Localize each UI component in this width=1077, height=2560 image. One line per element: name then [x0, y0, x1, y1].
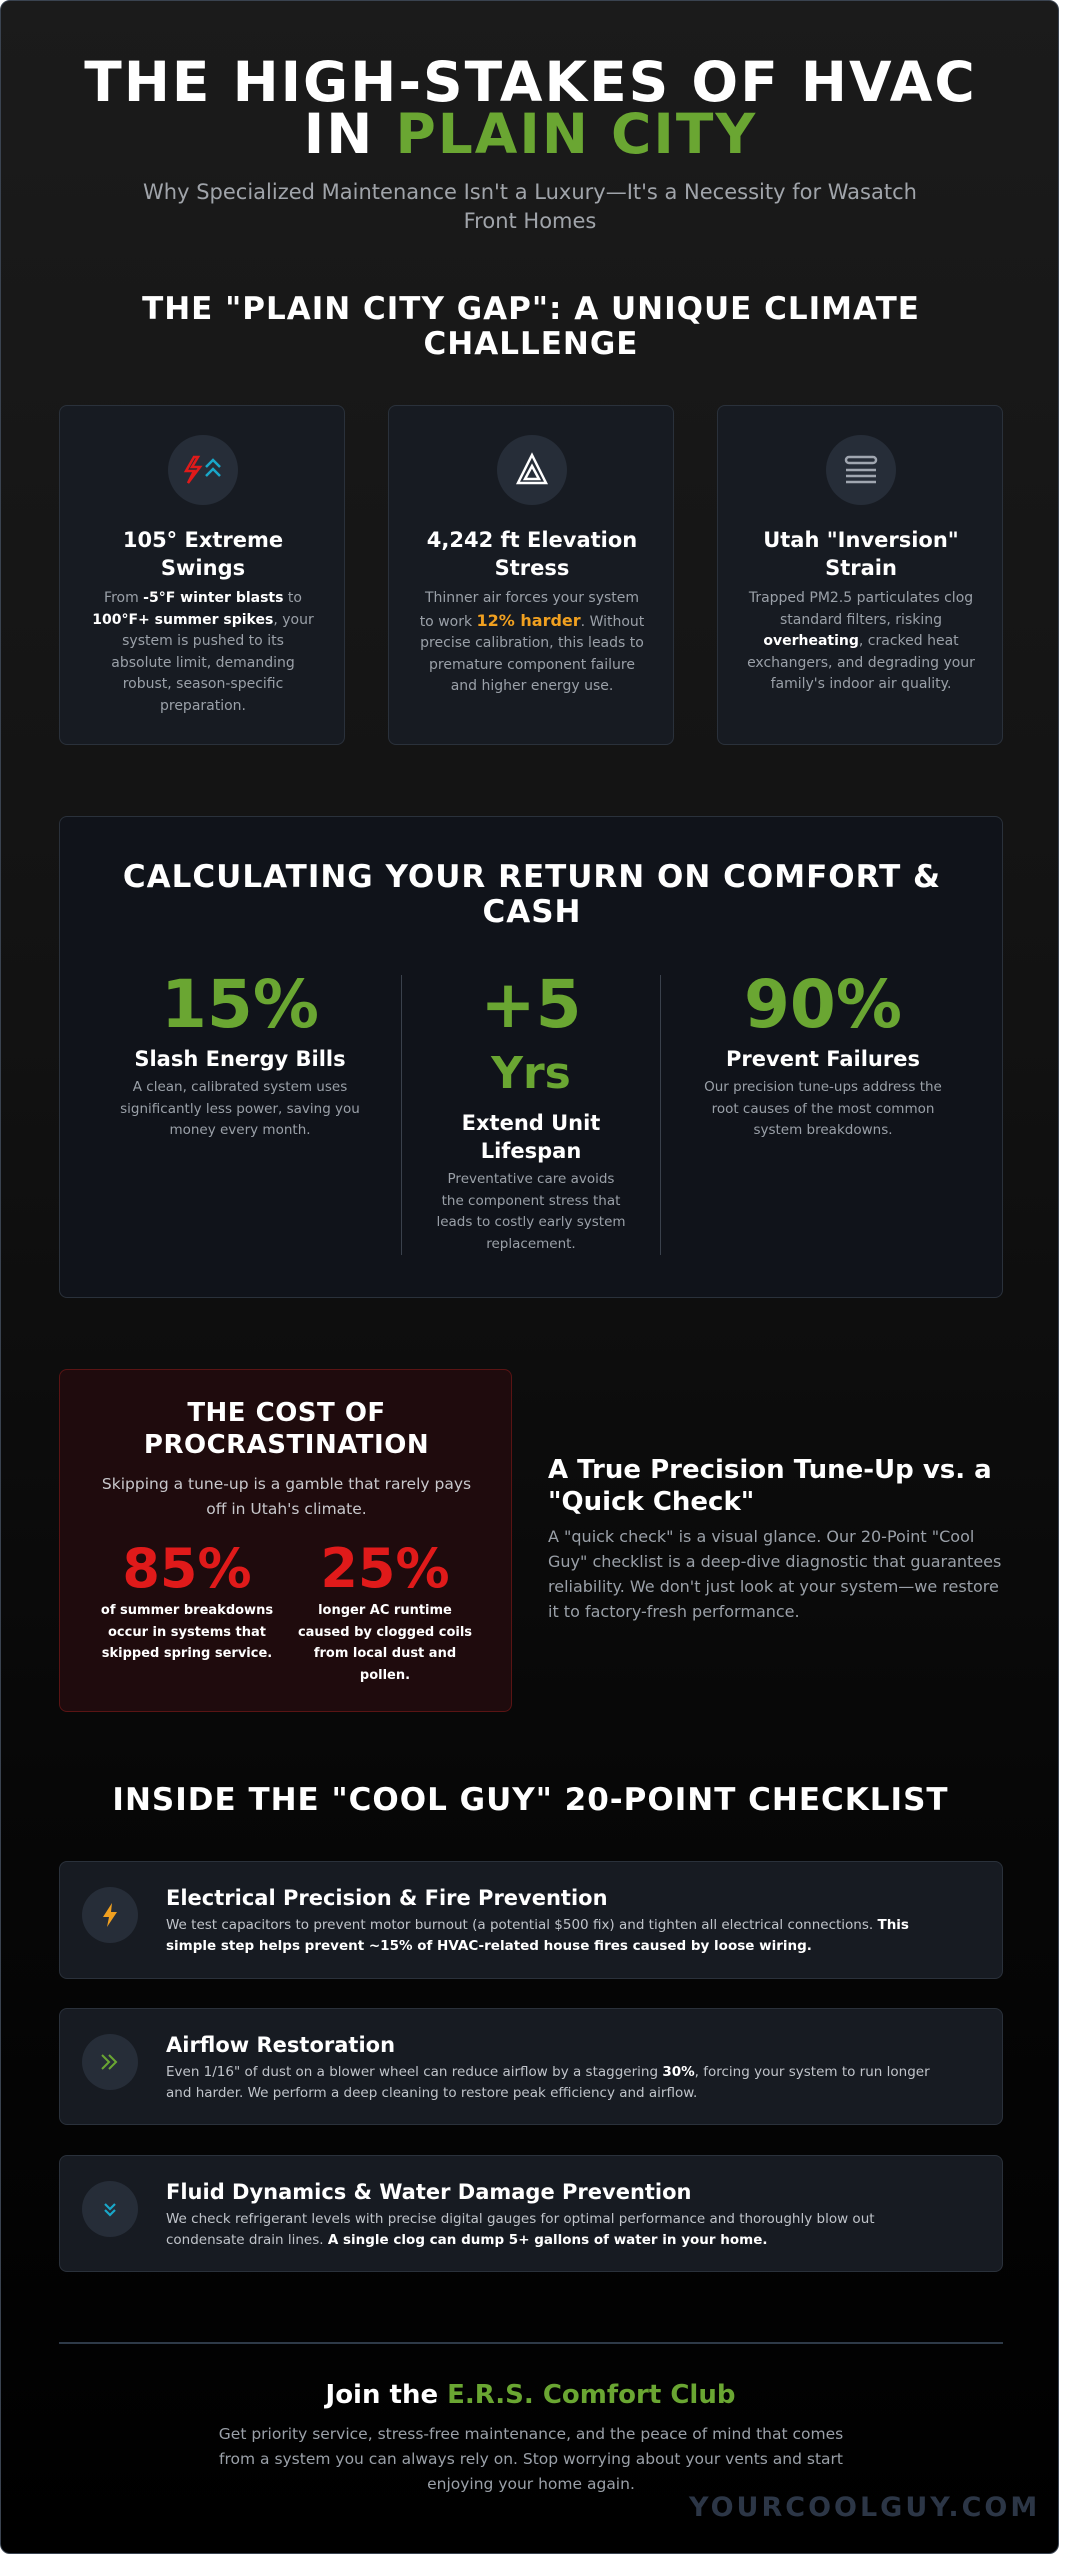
title: Fluid Dynamics & Water Damage Prevention — [166, 2180, 692, 2204]
stat: 15%: A clean, calibrated system uses significantly less power, saving you money every month. — [120, 1079, 360, 1138]
stat: 90%: Prevent Failures — [726, 1047, 920, 1071]
heading: PROCRASTINATION — [144, 1430, 429, 1460]
title: THE HIGH-STAKES OF HVAC — [84, 50, 977, 114]
card title: 105° Extreme — [123, 528, 283, 552]
stat: 85% — [101, 1537, 273, 1661]
card title — [427, 528, 637, 580]
card title: Swings — [161, 556, 245, 580]
title — [84, 50, 977, 166]
text block: precision tune-up: A True Precision Tune-Up vs. a "Quick Check" — [548, 1455, 992, 1517]
card title: Strain — [825, 556, 897, 580]
card title: Utah "Inversion" — [763, 528, 959, 552]
stat: 85%: of summer breakdowns occur in systems that skipped spring service. — [101, 1603, 273, 1661]
icon: mountain — [497, 435, 567, 505]
stat: +5 yrs — [436, 966, 626, 1252]
stat: 90% — [704, 966, 942, 1138]
card text: From -5°F winter blasts to 100°F+ summer spikes, your system is pushed to its absolute limit, demanding robust, season-specific preparation. — [92, 590, 314, 714]
footer text: Get priority service, stress-free maintenance, and the peace of mind that comes from a system you can always rely on. Stop worrying about your vents and start enjoying your home again. — [219, 2425, 843, 2493]
text: Even 1/16" of dust on a blower wheel can reduce airflow by a staggering 30%, forcing your system to run longer and harder. We perform a deep cleaning to restore peak efficiency and airflow. — [166, 2064, 930, 2101]
title: Electrical Precision & Fire Prevention — [166, 1886, 608, 1910]
panel: cost of procrastination — [59, 1369, 512, 1712]
card title: Stress — [495, 556, 569, 580]
heading: checklist: INSIDE THE "COOL GUY" 20-POINT CHECKLIST — [112, 1782, 949, 1818]
stat: 15% — [120, 966, 360, 1138]
panel: ROI — [59, 816, 1003, 1298]
icon: chevrons — [82, 2034, 138, 2090]
icon: bolt — [82, 1887, 138, 1943]
card text: Thinner air forces your system to work 12% harder. Without precise calibration, this leads to premature component failure and higher energy use. — [420, 590, 644, 694]
stat: 85%: 85% — [122, 1537, 252, 1600]
icon: lightning and arrows — [168, 435, 238, 505]
icon: filter lines — [826, 435, 896, 505]
panel: extreme swings — [59, 405, 345, 745]
card title — [123, 528, 283, 580]
heading: plain city gap: THE "PLAIN CITY GAP": A UNIQUE CLIMATE CHALLENGE — [142, 291, 920, 362]
card title — [763, 528, 959, 580]
icon: down chevrons — [82, 2181, 138, 2237]
brand watermark: YOURCOOLGUY.COM — [689, 2492, 1040, 2523]
text block: precision tune-up: A "quick check" is a visual glance. Our 20-Point "Cool Guy" checklist is a deep-dive diagnostic that guarantees reliability. We don't just look at your system—we restore it to factory-fresh performance. — [548, 1527, 1001, 1621]
stat: +5 yrs: Preventative care avoids the component stress that leads to costly early system replacement. — [436, 1171, 626, 1252]
stat: 15%: Slash Energy Bills — [134, 1047, 346, 1071]
subtitle: Why Specialized Maintenance Isn't a Luxury—It's a Necessity for Wasatch Front Homes — [143, 180, 917, 233]
stat: 90%: 90% — [744, 966, 902, 1043]
stat: 25% — [298, 1537, 472, 1682]
title: IN PLAIN CITY — [304, 102, 757, 166]
footer heading: Join the E.R.S. Comfort Club — [326, 2380, 735, 2410]
stat: +5 yrs: +5 — [480, 966, 582, 1043]
stat: 90%: Our precision tune-ups address the root causes of the most common system breakdowns. — [704, 1079, 942, 1138]
stat: 25%: longer AC runtime caused by clogged coils from local dust and pollen. — [298, 1603, 472, 1682]
heading: THE COST OF — [187, 1398, 386, 1428]
title: Airflow Restoration — [166, 2033, 395, 2057]
text: We test capacitors to prevent motor burnout (a potential $500 fix) and tighten all electrical connections. This simple step helps prevent ~15% of HVAC-related house fires caused by loose wiring. — [166, 1917, 909, 1954]
text block: precision tune-up — [548, 1455, 1001, 1621]
stat: +5 yrs: Lifespan — [481, 1139, 581, 1163]
checklist item: electrical — [59, 1861, 1003, 1979]
stat: +5 yrs: Extend Unit — [462, 1111, 600, 1135]
heading: CALCULATING YOUR RETURN ON COMFORT & CASH — [123, 859, 941, 930]
checklist item: fluid — [59, 2155, 1003, 2272]
panel: elevation — [388, 405, 674, 745]
stat: 15%: 15% — [161, 966, 319, 1043]
card title: 4,242 ft Elevation — [427, 528, 637, 552]
checklist item: airflow — [59, 2008, 1003, 2125]
stat: 25%: 25% — [320, 1537, 450, 1600]
stat: +5 yrs: Yrs — [491, 1048, 571, 1099]
text: We check refrigerant levels with precise digital gauges for optimal performance and thoroughly blow out condensate drain lines. A single clog can dump 5+ gallons of water in your home. — [166, 2211, 875, 2248]
panel: inversion — [717, 405, 1003, 745]
heading — [144, 1398, 429, 1460]
subtext: Skipping a tune-up is a gamble that rarely pays off in Utah's climate. — [102, 1475, 471, 1518]
card text: Trapped PM2.5 particulates clog standard filters, risking overheating, cracked heat exchangers, and degrading your family's indoor air quality. — [747, 590, 975, 692]
